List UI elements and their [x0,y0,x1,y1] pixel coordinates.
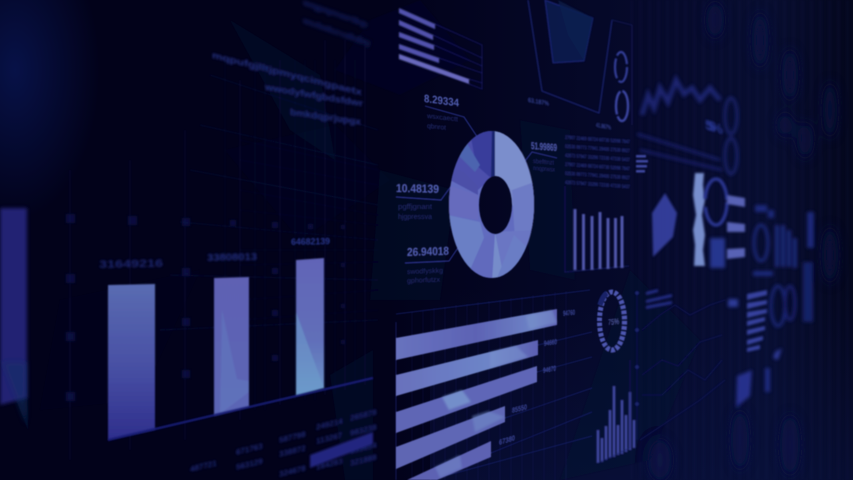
radar percentage labels [528,97,611,132]
blurred paragraph text, top: wsxbwbzrxalkdiry [302,15,371,49]
ring gauge 75% [600,292,624,350]
data table under bars: 587798 [279,430,306,445]
bar 3 [296,258,324,396]
bar 2 [214,277,249,416]
ring gauge 75%: 75% [608,317,619,327]
number table: 42873 57947 33298 72330 47330 5437 [565,153,630,164]
bar 85550 [396,406,505,469]
label: 51.99869: sbefttnzt [533,158,554,167]
line charts, lower right [637,293,725,440]
vertical bar chart [565,186,629,272]
value label: bar 1: 31649216 [99,258,163,271]
label: 51.99869: 51.99869 [531,141,557,154]
data table under bars: 113267 [316,431,343,446]
bar value labels: 85550 [512,402,527,415]
out-of-focus texture, right side [648,0,838,480]
bar value labels: 94670 [543,364,556,375]
bar value labels: 94760 [563,308,575,318]
bar chart baseline [108,378,373,440]
number table [565,135,630,191]
blurred paragraph text, top left: mqpufgjlltjpmyqcimgpaetx [212,50,363,99]
out-of-focus panel blocks [753,205,814,322]
data table under bars: 265878 [350,408,377,423]
blurred paragraph text, top left: wwodyfwfgbdsfdwr [264,82,363,110]
label: 10.48139: pgffjgnant [398,204,432,211]
label: 26.94018: 26.94018 [407,246,450,259]
data table under bars: 983238 [350,423,377,438]
grid nodes [66,214,345,401]
striped list block [747,290,767,352]
data table under bars: 563129 [236,457,263,472]
data table under bars: 487721 [190,459,217,474]
small histogram, right [710,238,725,268]
value label: bar 2: 33808013 [207,252,257,264]
bar 94670 [396,366,537,433]
data table under bars: 671763 [236,442,263,457]
donut chart [448,130,535,279]
three stacked bars [727,195,745,259]
pentagon radar, top [528,0,612,113]
bar value labels: 67380 [499,433,515,447]
label: 26.94018 [405,239,464,285]
small stacked list [636,155,648,172]
label: 26.94018: gphorfutzx [407,277,441,285]
out-of-focus rings and blobs [728,286,795,408]
large horizontal bar chart frame [396,290,592,480]
data table under bars: 338872 [279,444,306,459]
data table under bars [190,408,377,479]
short bars, lower right list [646,289,672,309]
small histogram [598,360,634,463]
blurred paragraph text, top [302,0,371,49]
label: 10.48139 [396,178,457,221]
data table under bars: 324678 [279,464,306,479]
line chart nodes [635,291,639,406]
data table under bars: 164283 [316,457,343,472]
number table: 42873 57947 33298 72330 47330 5437 [565,180,630,191]
bar 67380 [407,441,491,480]
table highlight row [310,432,373,468]
bar 94660 [396,340,538,396]
small ring gauges [612,20,632,125]
bright column waveform [693,173,705,266]
ring gauge, right [705,179,727,225]
label: 10.48139: 10.48139 [396,183,439,196]
data table under bars: 333654 [350,441,377,456]
blurred paragraph text, top left [212,50,363,128]
bar value labels [499,308,575,447]
left column bar (out of focus) [0,208,27,425]
number table: 02530 89773 77941 28400 27530 8927 [565,171,630,182]
bar 94760 [396,309,557,360]
label: 8.29334: 8.29334 [424,93,460,110]
label: 51.99869 [525,141,557,174]
bar 1 [108,284,155,440]
out-of-focus line chart [637,80,737,174]
data table under bars: 321888 [350,453,377,468]
number table: 02530 89773 77941 28400 27530 8927 [565,144,630,155]
top horizontal bars [399,8,482,89]
number table: 27907 22469 88724 60730 52098 7847 [565,135,630,146]
radar percentage labels: 41.867% [596,122,611,132]
label: 26.94018: swodfyskkg [407,268,443,276]
pentagon shape, middle [652,193,677,257]
label: 10.48139: hjgpressva [398,214,432,221]
value label: bar 3: 64682139 [291,236,330,247]
radar percentage labels: 63.187% [528,97,549,108]
data table under bars: 249214 [316,417,343,432]
label: 51.99869: nnqprwsx [533,165,556,174]
label: 8.29334: qbnrot [427,123,446,132]
number table: 27907 22469 88724 60730 52098 7847 [565,162,630,173]
label: 8.29334: wsxcaectt [426,113,458,123]
grid: left panel [70,40,378,460]
blurred value text, right: 55% [705,117,723,138]
blurred paragraph text, top left: bmkdqprjupgx [290,107,362,128]
bar value labels: 94660 [544,337,557,348]
label: 8.29334 [424,93,480,141]
